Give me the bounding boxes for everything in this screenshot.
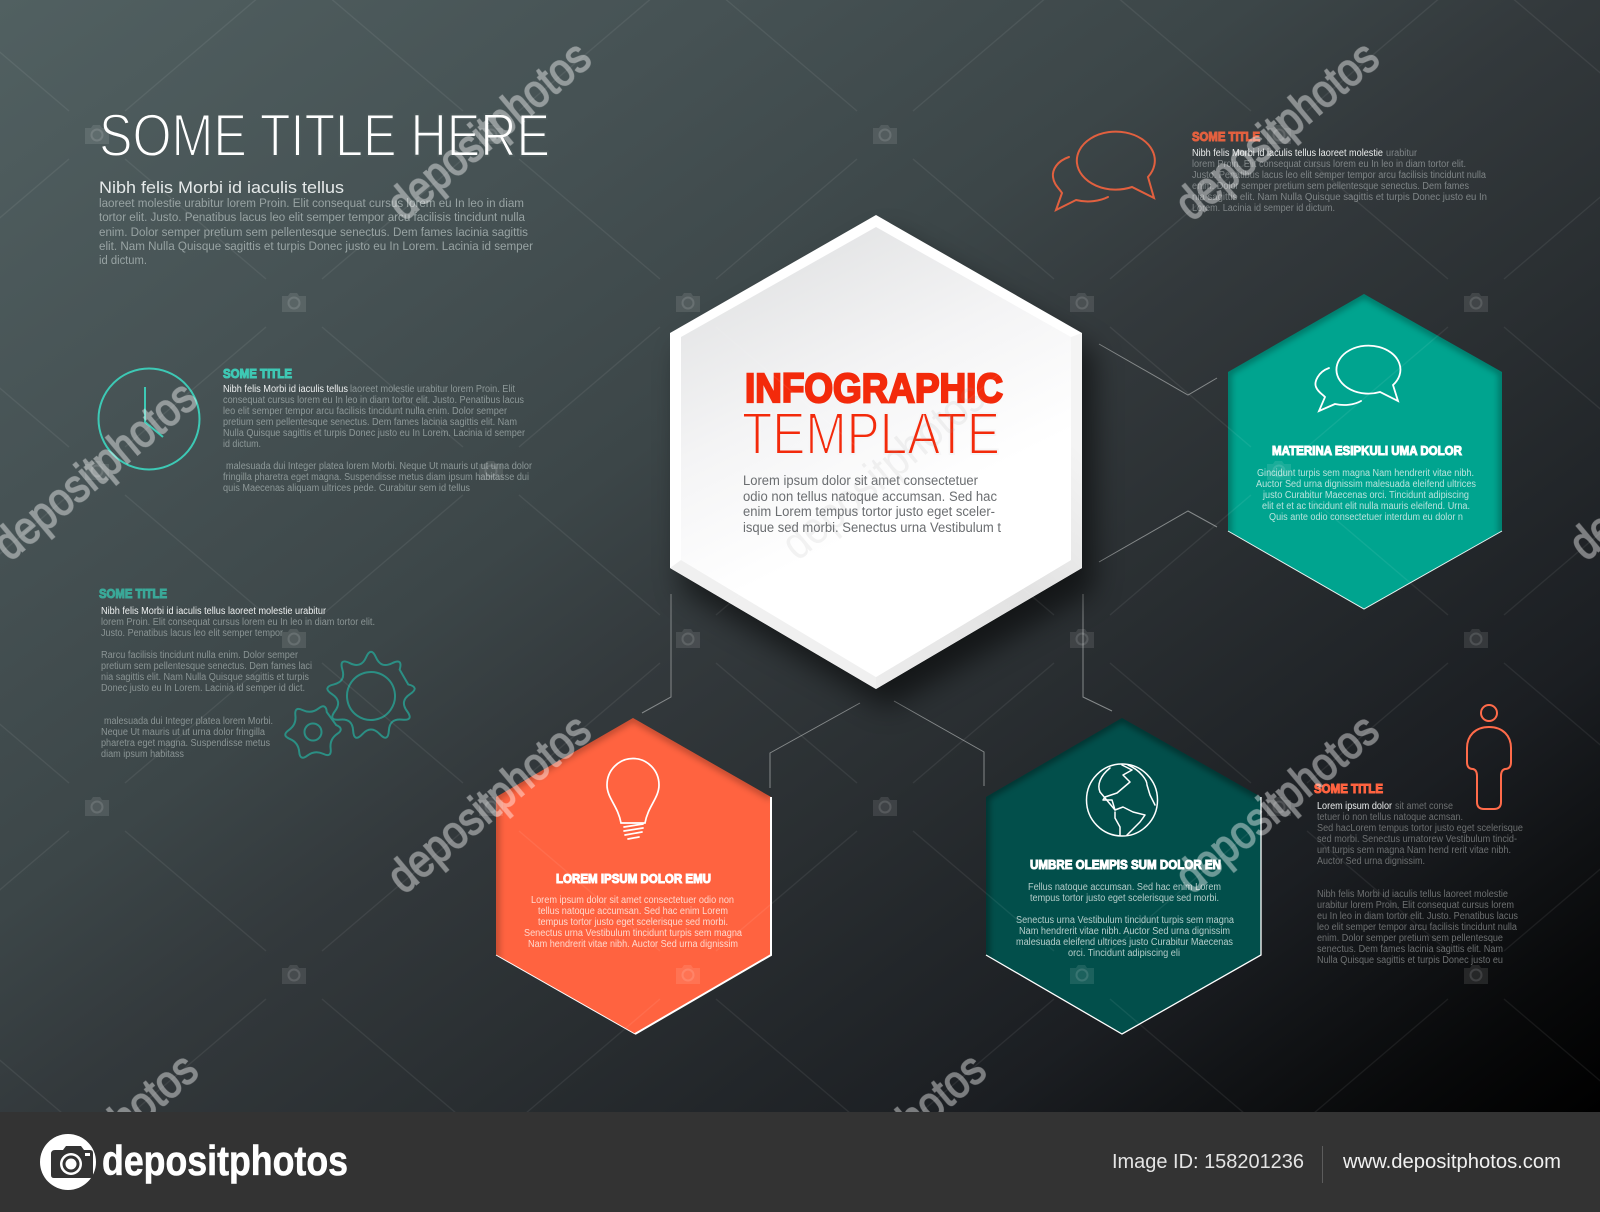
text block: Gincidunt turpis sem magna Nam hendrerit vitae nibh.: [1257, 468, 1474, 479]
text block: Senectus urna Vestibulum tincidunt turpis sem magna: [524, 928, 743, 939]
heading: SOME TITLE: [223, 367, 292, 381]
text block: lorem Proin. Elit consequat cursus lorem eu In leo in diam tortor elit.: [101, 617, 375, 628]
text block: Nulla Quisque sagittis et turpis Donec justo eu In Lorem. Lacinia id semper: [223, 428, 526, 439]
text block: Fellus natoque accumsan. Sed hac enim Lorem: [1028, 882, 1221, 893]
intro text: elit. Nam Nulla Quisque sagittis et turpis Donec justo eu In Lorem. Lacinia id semper: [99, 239, 533, 253]
watermark text: depositphotos: [377, 703, 600, 903]
text block: Neque Ut mauris ut ut urna dolor fringilla: [101, 727, 266, 738]
text block: [101, 606, 375, 760]
footer bar: [0, 1112, 1600, 1212]
text block: fringilla pharetra eget magna. Suspendisse metus diam ipsum habitasse dui: [223, 472, 529, 483]
icon: person: [1467, 705, 1511, 809]
intro text: [99, 196, 533, 267]
text block: pretium sem pellentesque senectus. Dem fames laci: [101, 661, 312, 672]
logo wordmark: depositphotos: [102, 1137, 348, 1184]
text block: leo elit semper tempor arcu facilisis tincidunt nulla: [1317, 922, 1517, 933]
intro text: enim. Dolor semper pretium sem pellentesque senectus. Dem fames lacinia sagittis: [99, 225, 528, 239]
text block: intro: enim Lorem tempus tortor justo eget sceler-: [743, 504, 995, 519]
panel: gears section: [99, 587, 422, 760]
text block: intro: Lorem ipsum dolor sit amet consectetuer: [743, 473, 978, 488]
text block: Nibh felis Morbi id iaculis tellus: [223, 384, 348, 395]
text block: tempus tortor justo eget scelerisque sed morbi.: [1030, 893, 1219, 904]
panel: dark teal hexagon: [986, 718, 1261, 1034]
text block: Nibh felis Morbi id iaculis tellus laoreet molestie: [1192, 148, 1384, 159]
heading: MATERINA ESIPKULI UMA DOLOR: [1272, 444, 1462, 458]
panel: orange hexagon: [496, 718, 771, 1034]
text block: Lorem. Lacinia id semper id dictum.: [1192, 203, 1335, 214]
text block: orci. Tincidunt adipiscing eli: [1068, 948, 1180, 959]
intro text: laoreet molestie urabitur lorem Proin. Elit consequat cursus lorem eu In leo in diam: [99, 196, 524, 210]
text block: malesuada dui Integer platea lorem Morbi. Neque Ut mauris ut ut urna dolor: [226, 461, 533, 472]
text block: unt turpis sem magna Nam hend rerit vitae nibh.: [1317, 845, 1511, 856]
text block: diam ipsum habitass: [101, 749, 184, 760]
text block: Donec justo eu In Lorem. Lacinia id semper id dict.: [101, 683, 305, 694]
heading: template: TEMPLATE: [742, 401, 1000, 467]
panel: speech section: [1053, 130, 1487, 214]
connector lines: [642, 344, 1217, 788]
icon: logo camera: [40, 1134, 96, 1190]
watermark text: faint on white hexagon: depositphotos: [771, 370, 994, 570]
text block: quis Maecenas aliquam ultrices pede. Curabitur sem id tellus: [223, 483, 470, 494]
text block: tetuer io non tellus natoque acmsan.: [1317, 812, 1463, 823]
image id: Image ID: 158201236: [1112, 1151, 1304, 1173]
text block: senectus. Dem fames lacinia sagittis elit. Nam: [1317, 944, 1503, 955]
heading: SOME TITLE: [1314, 782, 1383, 796]
heading: SOME TITLE: [1192, 130, 1260, 144]
text block: Nam hendrerit vitae nibh. Auctor Sed urna dignissim: [1019, 926, 1230, 937]
heading: SOME TITLE: [99, 587, 167, 601]
intro text: id dictum.: [99, 253, 147, 267]
text block: Justo. Penatibus lacus leo elit semper tempor arcu facilisis tincidunt nulla: [1192, 170, 1486, 181]
text block: pharetra eget magna. Suspendisse metus: [101, 738, 270, 749]
text block: Senectus urna Vestibulum tincidunt turpis sem magna: [1016, 915, 1235, 926]
icon: gears: [283, 645, 422, 759]
panel: person section: [1314, 705, 1524, 966]
heading: infographic: INFOGRAPHIC: [745, 365, 1003, 411]
text block: [1317, 801, 1524, 966]
text block: Justo. Penatibus lacus leo elit semper tempor: [101, 628, 284, 639]
text block: malesuada eleifend ultrices justo Curabitur Maecenas: [1016, 937, 1233, 948]
watermark text: depositphotos: [1165, 30, 1388, 230]
text block: [1192, 148, 1487, 214]
text block: Lorem ipsum dolor sit amet consectetuer odio non: [531, 895, 734, 906]
subtitle: Nibh felis Morbi id iaculis tellus: [99, 178, 344, 197]
text block: urabitur: [1386, 148, 1418, 159]
panel: clock section: [98, 367, 533, 494]
text block: Sed hacLorem tempus tortor justo eget scelerisque: [1317, 823, 1524, 834]
text block: Nibh felis Morbi id iaculis tellus laoreet molestie: [1317, 889, 1509, 900]
watermark text: depositphotos: [377, 30, 600, 230]
panel: teal hexagon: [1228, 294, 1502, 609]
text block: intro: isque sed morbi. Senectus urna Vestibulum t: [743, 520, 1001, 535]
text block: urabitur lorem Proin. Elit consequat cursus lorem: [1317, 900, 1514, 911]
text block: leo elit semper tempor arcu facilisis tincidunt nulla enim. Dolor semper: [223, 406, 508, 417]
text block: intro: [743, 473, 1001, 535]
text block: Auctor Sed urna dignissim.: [1317, 856, 1425, 867]
heading: UMBRE OLEMPIS SUM DOLOR EN: [1030, 858, 1221, 872]
watermark text: depositphotos: [1165, 703, 1388, 903]
text block: enim. Dolor semper pretium sem pellentesque senectus. Dem fames: [1192, 181, 1469, 192]
text block: Lorem ipsum dolor: [1317, 801, 1393, 812]
icon: globe: [1086, 764, 1158, 836]
heading: LOREM IPSUM DOLOR EMU: [556, 872, 711, 886]
text block: id dictum.: [223, 439, 261, 450]
text block: consequat cursus lorem eu In leo in diam tortor elit. Justo. Penatibus lacus: [223, 395, 524, 406]
text block: nia sagittis elit. Nam Nulla Quisque sagittis et turpis Donec justo eu In: [1192, 192, 1487, 203]
text block: eu In leo in diam tortor elit. Justo. Penatibus lacus: [1317, 911, 1518, 922]
text block: [1256, 468, 1476, 523]
text block: Auctor Sed urna dignissim malesuada eleifend ultrices: [1256, 479, 1476, 490]
website: www.depositphotos.com: [1342, 1151, 1561, 1173]
icon: light bulb: [607, 758, 659, 839]
icon: clock: [98, 368, 200, 470]
text block: [524, 895, 743, 950]
icon: speech bubbles: [1053, 132, 1155, 210]
text block: Nibh felis Morbi id iaculis tellus laoreet molestie urabitur: [101, 606, 327, 617]
main title: SOME TITLE HERE: [99, 102, 550, 169]
text block: nia sagittis elit. Nam Nulla Quisque sagittis et turpis: [101, 672, 309, 683]
text block: enim. Dolor semper pretium sem pellentesque: [1317, 933, 1504, 944]
text block: [1016, 882, 1235, 959]
text block: laoreet molestie urabitur lorem Proin. Elit: [350, 384, 515, 395]
intro text: tortor elit. Justo. Penatibus lacus leo elit semper tempor arcu facilisis tincidunt nulla: [99, 210, 525, 224]
icon: speech bubbles: [1316, 346, 1400, 411]
text block: Nulla Quisque sagittis et turpis Donec justo eu: [1317, 955, 1503, 966]
text block: pretium sem pellentesque senectus. Dem fames lacinia sagittis elit. Nam: [223, 417, 517, 428]
panel: central white hexagon: [670, 215, 1094, 708]
text block: intro: odio non tellus natoque accumsan. Sed hac: [743, 489, 997, 504]
text block: justo Curabitur Maecenas orci. Tincidunt adipiscing: [1262, 490, 1469, 501]
text block: lorem Proin. Elit consequat cursus lorem eu In leo in diam tortor elit.: [1192, 159, 1466, 170]
text block: elit et et ac tincidunt elit nulla mauris eleifend. Urna.: [1262, 501, 1470, 512]
title block: [99, 102, 550, 267]
text block: malesuada dui Integer platea lorem Morbi.: [104, 716, 273, 727]
text block: sit amet conse: [1395, 801, 1453, 812]
text block: Nam hendrerit vitae nibh. Auctor Sed urna dignissim: [528, 939, 738, 950]
text block: sed morbi. Senectus urnatorew Vestibulum tincid-: [1317, 834, 1517, 845]
text block: Rarcu facilisis tincidunt nulla enim. Dolor semper: [101, 650, 299, 661]
text block: Quis ante odio consectetuer interdum eu dolor n: [1269, 512, 1463, 523]
text block: tempus tortor justo eget scelerisque sed morbi.: [538, 917, 728, 928]
text block: tellus natoque accumsan. Sed hac enim Lorem: [538, 906, 728, 917]
text block: [223, 384, 533, 494]
